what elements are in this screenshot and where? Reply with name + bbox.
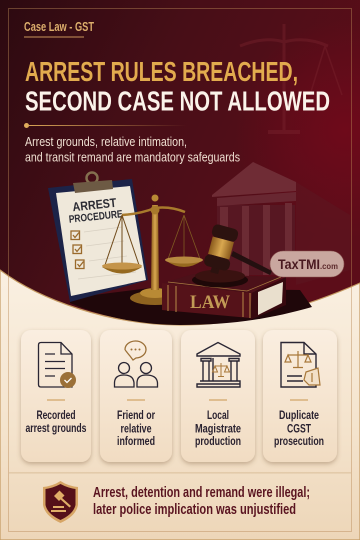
label: Case Law - GST	[24, 20, 94, 38]
clipboard checklist	[71, 227, 136, 279]
caption: Local	[207, 410, 229, 422]
subtitle	[25, 134, 240, 164]
icon: law book	[162, 274, 286, 320]
watermark: temple	[212, 162, 350, 285]
icon: clipboard	[48, 172, 148, 302]
clipboard heading: ARREST	[72, 196, 117, 214]
icon: gavel	[192, 223, 272, 288]
icon: two people with speech bubble	[114, 341, 158, 387]
panel: card recorded arrest grounds	[21, 330, 91, 462]
conclusion text: later police implication was unjustified	[93, 502, 296, 518]
background: maroon header	[0, 0, 360, 340]
caption	[117, 410, 155, 448]
book label: LAW	[190, 292, 230, 313]
panel: card magistrate production	[181, 330, 255, 462]
divider above conclusion	[9, 472, 351, 474]
conclusion text	[93, 485, 310, 518]
icon: balance scales	[102, 194, 203, 305]
clipboard heading	[67, 195, 123, 226]
title	[25, 56, 330, 116]
caption: CGST	[287, 424, 311, 436]
icon: document with check	[38, 342, 72, 387]
caption: prosecution	[274, 436, 324, 448]
caption: informed	[117, 436, 155, 448]
caption: production	[195, 436, 241, 448]
caption: relative	[120, 424, 152, 436]
label: Case Law - GST: Case Law - GST	[24, 20, 94, 34]
panel: card duplicate prosecution	[263, 330, 337, 462]
caption: arrest grounds	[26, 423, 86, 435]
icon: shield with gavel	[43, 481, 78, 523]
subtitle: and transit remand are mandatory safeguards	[25, 150, 240, 164]
caption: Recorded	[36, 410, 76, 422]
icon: courthouse with scales	[197, 342, 240, 387]
caption: Duplicate	[279, 410, 319, 422]
caption: Magistrate	[195, 424, 241, 436]
icon: legal document with duplicate seal	[281, 342, 320, 387]
watermark: faint scales	[240, 24, 342, 132]
caption	[195, 410, 241, 448]
illustration shadow	[70, 288, 312, 325]
panel: card friend or relative	[100, 330, 172, 462]
caption	[274, 410, 324, 448]
clipboard heading: PROCEDURE	[68, 208, 123, 226]
panel: cream lower section	[0, 270, 360, 540]
badge: TaxTMI.com	[270, 251, 344, 277]
badge: TaxTMI.com: TaxTMI	[278, 257, 320, 272]
caption: Friend or	[117, 410, 155, 422]
icon: check badge	[60, 372, 76, 388]
badge: TaxTMI.com: .com	[320, 261, 338, 271]
divider with dot	[24, 123, 187, 128]
subtitle: Arrest grounds, relative intimation,	[25, 134, 187, 149]
caption	[26, 410, 86, 435]
